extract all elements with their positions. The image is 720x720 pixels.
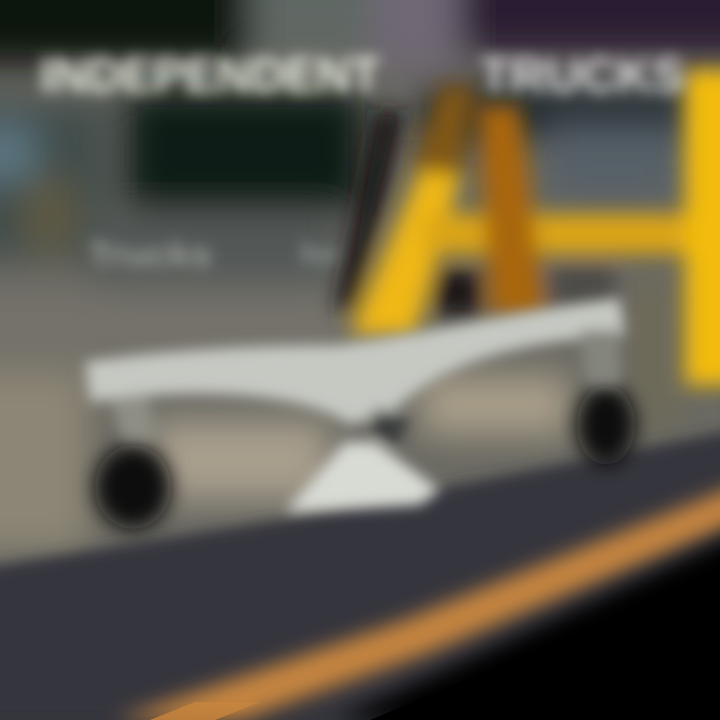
orange deck edge xyxy=(115,472,720,720)
subtitle xyxy=(88,236,340,274)
wheel: left xyxy=(95,445,171,529)
subtitle: Trucks xyxy=(88,236,212,274)
title xyxy=(40,47,685,103)
yellow frame structure xyxy=(335,70,720,385)
truck axle xyxy=(85,298,625,512)
title: TRUCKS xyxy=(480,47,685,103)
title: INDEPENDENT xyxy=(40,47,380,103)
subtitle: for xyxy=(300,238,340,271)
wheel: right xyxy=(577,385,635,465)
black corner shadow xyxy=(335,515,720,720)
dark deck surface xyxy=(0,423,720,720)
